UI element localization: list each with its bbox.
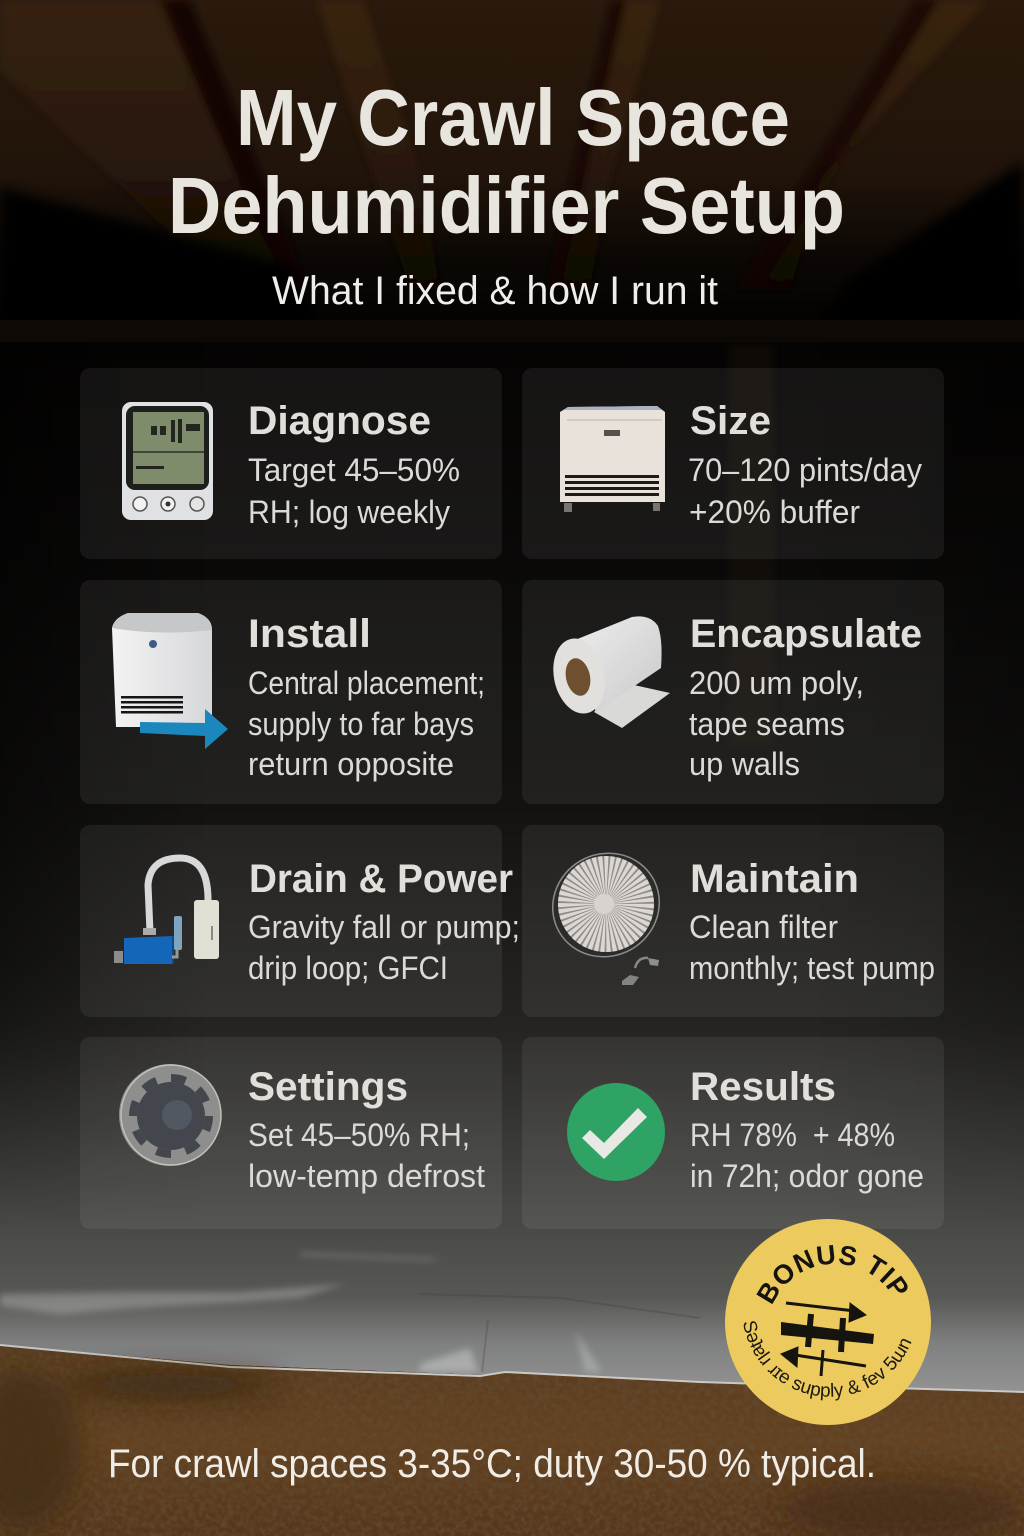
subtitle: What I fixed & how I run it xyxy=(272,269,718,313)
icon: poly roll xyxy=(547,616,670,728)
heading: install: Install xyxy=(248,612,371,656)
text: diagnose detail: Target 45–50% xyxy=(248,452,460,488)
text: results detail: in 72h; odor gone xyxy=(690,1158,924,1194)
heading: results: Results xyxy=(690,1065,836,1109)
panel: results xyxy=(522,1037,944,1229)
text: install detail: Central placement; xyxy=(248,665,485,701)
text: settings detail xyxy=(248,1117,485,1194)
icon: condensate pump and plug xyxy=(114,858,219,964)
text: maintain detail: Clean filter xyxy=(689,909,838,945)
heading: drain and power: Drain & Power xyxy=(249,857,513,901)
text: drain and power detail xyxy=(248,909,520,986)
title: My Crawl Space xyxy=(236,73,790,162)
title xyxy=(168,73,845,250)
panel: size xyxy=(522,368,944,559)
icon: hygrometer xyxy=(122,402,213,520)
panel: diagnose xyxy=(80,368,502,559)
heading: diagnose: Diagnose xyxy=(248,399,431,443)
text: results detail: RH 78% + 48% xyxy=(690,1117,895,1153)
heading: encapsulate: Encapsulate xyxy=(690,612,922,656)
badge caption: Sǝʇɐlɹ ɹɪe supply & fev 5ɯn xyxy=(744,1321,912,1400)
icon: gear dial xyxy=(119,1064,221,1166)
text: drain and power detail: drip loop; GFCI xyxy=(248,950,448,986)
icon: dehumidifier unit xyxy=(560,406,665,512)
heading: settings: Settings xyxy=(248,1065,408,1109)
text: results detail xyxy=(690,1117,924,1194)
text: diagnose detail: RH; log weekly xyxy=(248,494,450,530)
icon: pleated filter xyxy=(534,834,678,985)
text: settings detail: low-temp defrost xyxy=(248,1158,485,1194)
text: size detail: +20% buffer xyxy=(689,494,860,530)
text: size detail: 70–120 pints/day xyxy=(688,452,922,488)
text: maintain detail: monthly; test pump xyxy=(689,950,935,986)
icon: green check xyxy=(567,1083,665,1181)
icon: supply and return arrows xyxy=(781,1303,874,1376)
title: Dehumidifier Setup xyxy=(168,161,845,250)
text: install detail: supply to far bays xyxy=(248,706,474,742)
text: maintain detail xyxy=(689,909,935,986)
text: diagnose detail xyxy=(248,452,460,530)
footer note: For crawl spaces 3-35°C; duty 30-50 % typical. xyxy=(108,1442,876,1486)
text: install detail xyxy=(248,665,485,782)
text: drain and power detail: Gravity fall or pump; xyxy=(248,909,520,945)
text: encapsulate detail: tape seams xyxy=(689,706,845,742)
heading: maintain: Maintain xyxy=(690,857,859,901)
text: encapsulate detail: 200 um poly, xyxy=(689,665,864,701)
panel: settings xyxy=(80,1037,502,1229)
panel: encapsulate xyxy=(522,580,944,804)
text: settings detail: Set 45–50% RH; xyxy=(248,1117,470,1153)
panel: drain and power xyxy=(80,825,520,1017)
icon: dehumidifier with airflow arrow xyxy=(112,613,228,749)
badge heading: BONUS TIP xyxy=(756,1245,908,1304)
text: size detail xyxy=(688,452,922,530)
badge: bonus tip xyxy=(725,1219,931,1425)
heading: size: Size xyxy=(690,399,771,443)
panel: install xyxy=(80,580,502,804)
text: install detail: return opposite xyxy=(248,746,454,782)
panel: maintain xyxy=(522,825,944,1017)
text: encapsulate detail: up walls xyxy=(689,746,800,782)
text: encapsulate detail xyxy=(689,665,864,782)
